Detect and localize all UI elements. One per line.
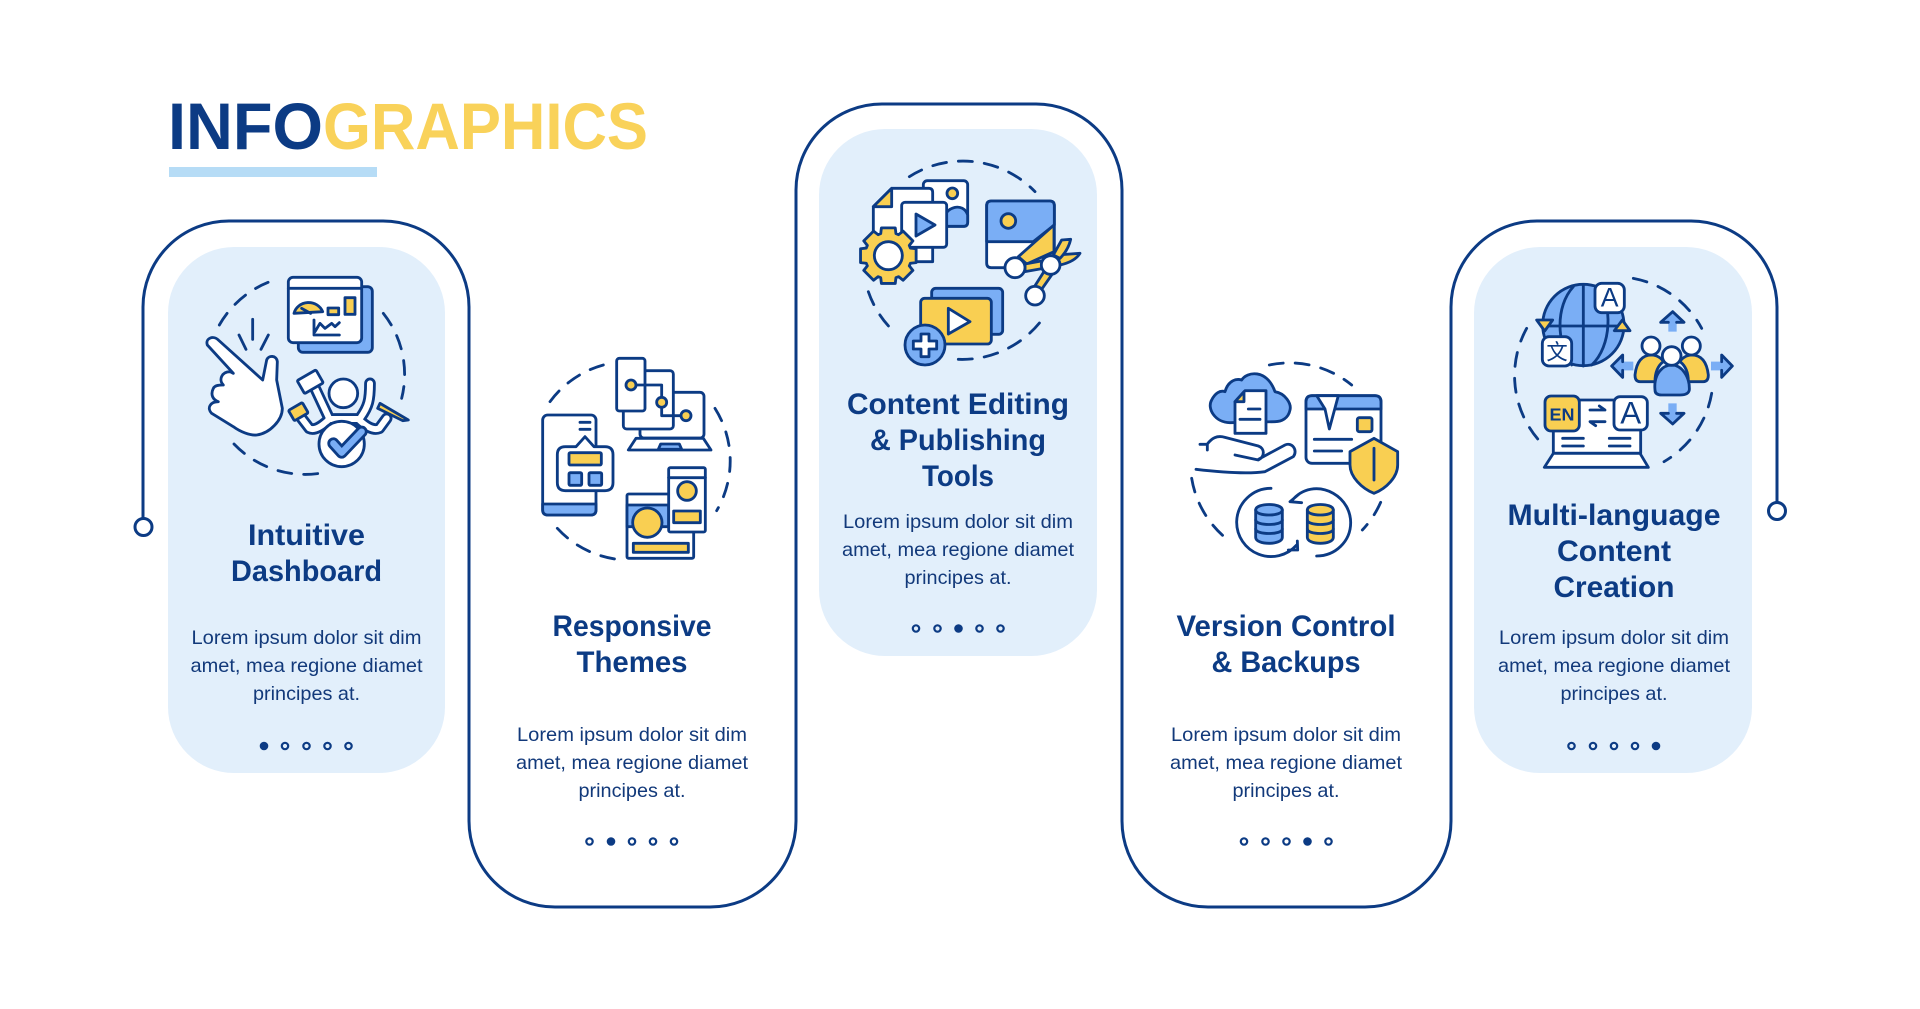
heading: Themes (576, 646, 688, 679)
body text: principes at. (578, 780, 686, 802)
pagination dots (913, 625, 1004, 632)
body text (516, 724, 749, 802)
heading: Tools (922, 460, 994, 493)
icon: translation globe, audience and laptop: A (1601, 283, 1619, 313)
body text: amet, mea regione diamet (842, 539, 1075, 561)
icon: translation globe, audience and laptop: 文 (1546, 340, 1568, 364)
body text: principes at. (1560, 683, 1668, 705)
body text: amet, mea regione diamet (190, 655, 423, 677)
icon: dashboard hand and multitasking person (207, 277, 408, 474)
heading: Responsive (552, 610, 712, 643)
heading: Dashboard (231, 555, 382, 588)
body text: Lorem ipsum dolor sit dim (1499, 627, 1729, 649)
panel: intuitive dashboard (168, 247, 445, 773)
icon: translation globe, audience and laptop: A (1620, 395, 1641, 430)
heading: Multi-language (1508, 499, 1720, 532)
pagination dots (1241, 838, 1332, 845)
icon: translation globe, audience and laptop: EN (1550, 405, 1574, 425)
body text (842, 511, 1075, 589)
heading: & Publishing (870, 424, 1046, 457)
body text: Lorem ipsum dolor sit dim (1171, 724, 1401, 746)
title (168, 89, 648, 177)
body text: amet, mea regione diamet (1498, 655, 1731, 677)
heading (231, 519, 382, 588)
body text: principes at. (1232, 780, 1340, 802)
icon: responsive devices (543, 358, 730, 559)
heading (1508, 499, 1720, 604)
heading: Intuitive (248, 519, 365, 552)
body text (1170, 724, 1403, 802)
pagination dots (261, 743, 352, 749)
pagination dots (586, 838, 677, 845)
connector outline (135, 104, 1786, 907)
body text: principes at. (904, 567, 1012, 589)
icon: translation globe, audience and laptop (1515, 278, 1732, 467)
panel: version control and backups (1170, 363, 1403, 845)
panel: multi-language content creation (1474, 247, 1752, 773)
body text (190, 627, 423, 705)
heading: Content (1557, 535, 1671, 568)
panel: responsive themes (516, 358, 749, 845)
icon: content editing tools (861, 161, 1080, 365)
heading (552, 610, 712, 679)
pagination dots (1568, 743, 1659, 749)
heading: Creation (1554, 571, 1674, 604)
body text: Lorem ipsum dolor sit dim (517, 724, 747, 746)
body text: principes at. (253, 683, 360, 705)
title: GRAPHICS (323, 89, 648, 163)
heading: Content Editing (847, 388, 1069, 421)
heading (1176, 610, 1396, 679)
icon: cloud, secure window and database sync (1192, 363, 1398, 557)
heading: Version Control (1176, 610, 1396, 643)
panel: content editing and publishing tools (819, 129, 1097, 656)
title: INFO (168, 89, 323, 163)
body text (1498, 627, 1731, 705)
body text: amet, mea regione diamet (516, 752, 749, 774)
heading: & Backups (1212, 646, 1360, 679)
body text: Lorem ipsum dolor sit dim (843, 511, 1073, 533)
heading (847, 388, 1069, 493)
body text: amet, mea regione diamet (1170, 752, 1403, 774)
body text: Lorem ipsum dolor sit dim (192, 627, 422, 649)
